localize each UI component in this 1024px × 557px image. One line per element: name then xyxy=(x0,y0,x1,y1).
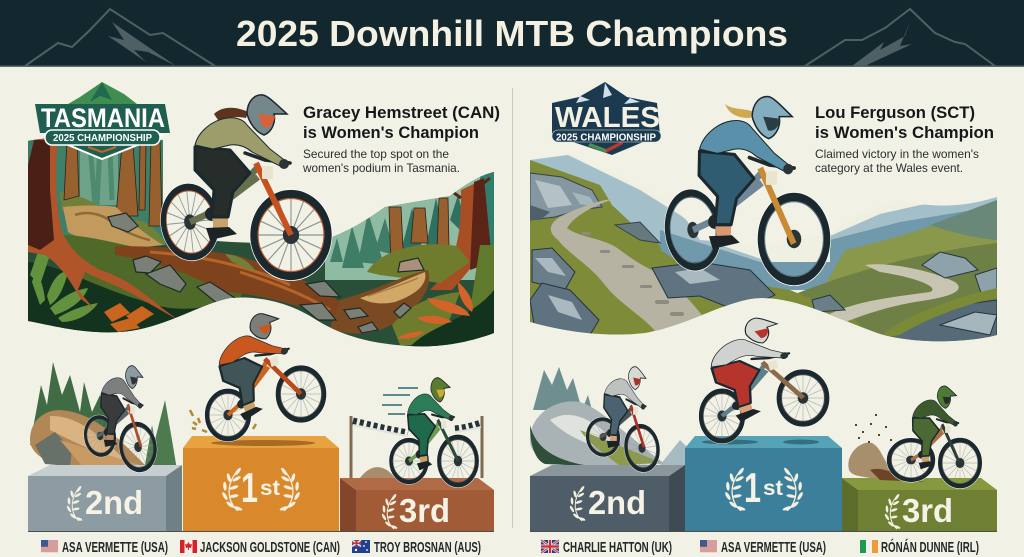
ferns xyxy=(30,254,98,322)
names: Tasmania xyxy=(41,539,481,556)
header banner xyxy=(0,0,1024,67)
text block: Wales champion: category at the Wales event. xyxy=(815,161,963,175)
panel: Wales podium xyxy=(530,311,997,531)
text block: Tasmania champion: is Women's Champion xyxy=(303,124,479,142)
text block: Wales champion: Lou Ferguson (SCT) xyxy=(815,104,975,122)
scene: mountain berm behind 2nd xyxy=(530,367,700,466)
podium block: second xyxy=(28,465,182,531)
moss humps xyxy=(60,192,98,212)
valley slope xyxy=(780,243,997,345)
left rock crag xyxy=(530,173,602,220)
icon: left mountain outline xyxy=(25,9,215,66)
label: Asa Vermette: ASA VERMETTE (USA) xyxy=(721,539,826,556)
rank: 1st: 1 xyxy=(744,464,761,511)
stony trail xyxy=(550,199,702,331)
rider: Gracey Hemstreet xyxy=(158,95,331,279)
rank: 1st xyxy=(724,464,804,511)
text block: Tasmania champion: women's podium in Tasmania. xyxy=(302,161,460,175)
text block: Tasmania champion: Secured the top spot on the xyxy=(303,147,449,161)
moss right xyxy=(367,244,470,283)
rider: Troy Brosnan, 3rd xyxy=(390,375,479,487)
root log xyxy=(115,246,340,316)
text block: Wales champion: is Women's Champion xyxy=(815,124,994,142)
podium block: first xyxy=(183,436,339,531)
green hillside left xyxy=(530,160,862,334)
text block: Tasmania champion xyxy=(302,104,500,175)
right rocks xyxy=(885,252,997,345)
left big trunk xyxy=(28,137,178,320)
panel: Wales scene xyxy=(525,150,1005,350)
icon: right mountain outline xyxy=(805,9,995,66)
rank: 2nd: 2nd xyxy=(85,484,143,521)
center rock band xyxy=(652,262,775,312)
podium block: third xyxy=(340,478,494,531)
logo text: Tasmania: TASMANIA xyxy=(41,103,165,133)
rank: 3rd: 3rd xyxy=(902,492,953,529)
left foreground rocks xyxy=(530,248,599,335)
right trail xyxy=(330,270,429,334)
rank: 3rd: 3rd xyxy=(399,492,450,529)
forest backdrop left xyxy=(28,138,165,245)
flag: Canada xyxy=(180,540,197,553)
logo text: Wales: WALES xyxy=(555,102,660,134)
rank: 1st: st xyxy=(763,477,783,500)
tree trunks xyxy=(64,140,162,226)
text block: Wales champion xyxy=(815,104,994,175)
icon: Wales logo xyxy=(552,82,661,155)
scene: forest berm behind 2nd xyxy=(30,362,177,470)
title: 2025 Downhill MTB Champions xyxy=(236,13,788,54)
panel: Tasmania scene xyxy=(28,138,494,346)
podium block: third xyxy=(842,478,997,531)
flag: USA xyxy=(41,540,58,553)
label: Jackson Goldstone: JACKSON GOLDSTONE (CAN) xyxy=(200,539,340,556)
podium block: first xyxy=(685,436,842,531)
ground lines xyxy=(28,530,997,532)
rank: 1st xyxy=(221,464,301,511)
panel: Tasmania podium xyxy=(28,306,494,531)
divider xyxy=(512,88,513,528)
rider: Asa Vermette, 1st xyxy=(698,311,829,443)
flag: Ireland xyxy=(860,540,878,553)
label: Asa Vermette: ASA VERMETTE (USA) xyxy=(62,539,168,556)
orange pile xyxy=(104,303,154,332)
label: Troy Brosnan: TROY BROSNAN (AUS) xyxy=(374,539,481,556)
text block: Tasmania champion: Gracey Hemstreet (CAN) xyxy=(303,104,500,122)
rank: 1st: 1 xyxy=(241,464,258,511)
flag: United Kingdom xyxy=(541,540,559,553)
flag: USA xyxy=(700,540,717,553)
rocks xyxy=(108,213,424,333)
dirt spray xyxy=(190,410,256,432)
foreground dark right xyxy=(410,290,494,347)
text block: Wales champion: Claimed victory in the women's xyxy=(815,147,979,161)
logo text: 2025 Championship: 2025 CHAMPIONSHIP xyxy=(53,132,152,144)
rider: Asa Vermette, 2nd xyxy=(82,364,160,474)
forest backdrop right xyxy=(325,172,494,280)
mid ground green band xyxy=(62,235,250,331)
icon: Tasmania logo xyxy=(35,82,170,159)
names: Wales xyxy=(541,538,979,556)
rank: 2nd: 2nd xyxy=(588,484,646,521)
rider: Lou Ferguson xyxy=(661,97,830,284)
distant mountains xyxy=(530,155,997,262)
logo text: 2025 Championship: 2025 CHAMPIONSHIP xyxy=(556,132,656,144)
rider: Charlie Hatton, 2nd xyxy=(584,365,662,474)
orange leaves right xyxy=(397,282,473,339)
flag: Australia xyxy=(352,540,370,553)
podium block: second xyxy=(530,465,685,531)
winding far trail xyxy=(830,264,959,322)
lower left dark undergrowth xyxy=(28,262,202,332)
left trail xyxy=(63,206,163,250)
rider: Rónán Dunne, 3rd xyxy=(887,385,982,488)
dirt cloud xyxy=(848,415,925,482)
finish banner xyxy=(351,388,482,478)
rank: 1st: st xyxy=(260,477,280,500)
label: Charlie Hatton: CHARLIE HATTON (UK) xyxy=(563,539,672,556)
rider: Jackson Goldstone, 1st xyxy=(205,306,326,441)
